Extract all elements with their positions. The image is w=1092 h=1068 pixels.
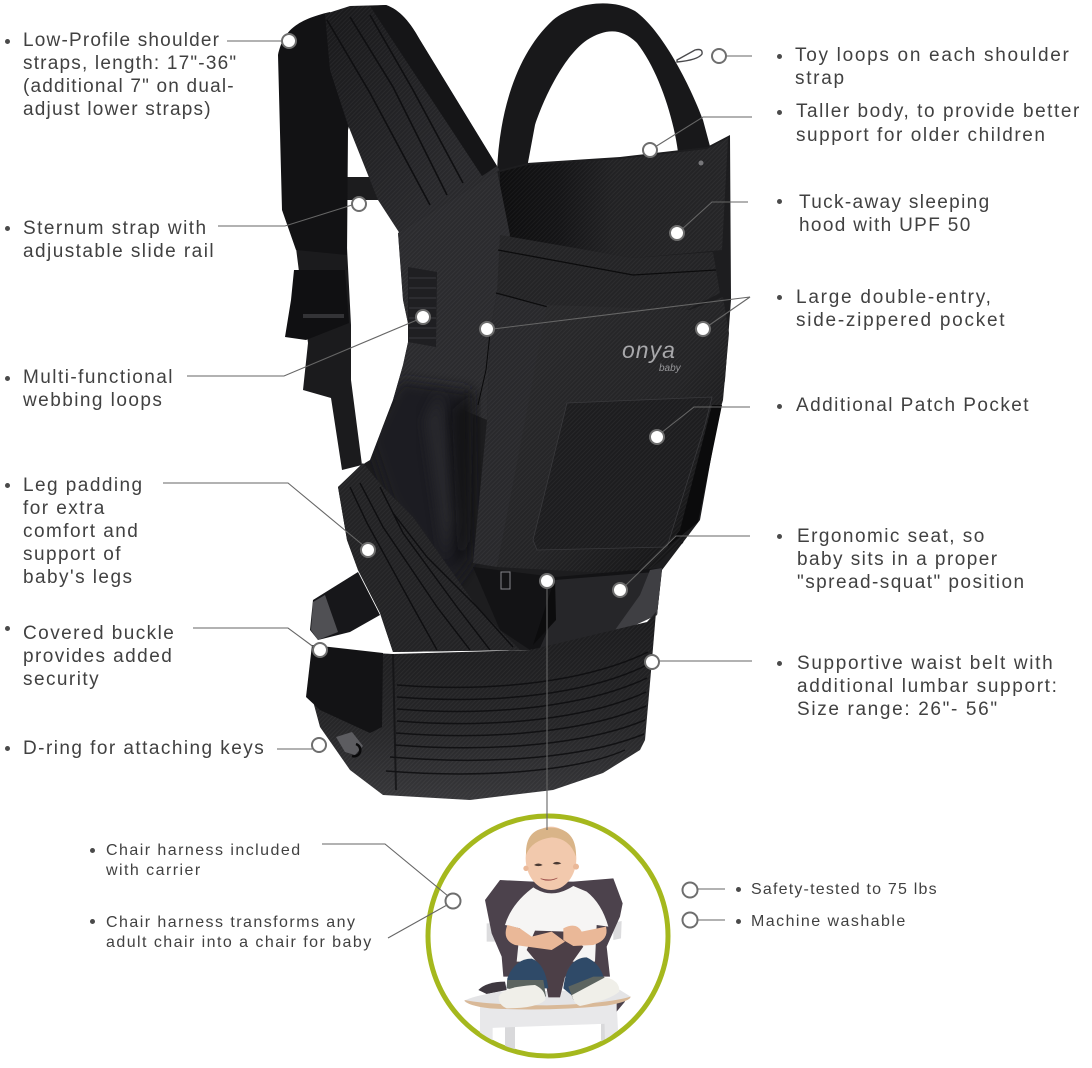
text: shoulder straps: (additional 7" on dual- xyxy=(23,76,235,97)
text: waist belt: Supportive waist belt with xyxy=(797,653,1054,674)
text: webbing loops: webbing loops xyxy=(23,390,163,411)
text: waist belt: Size range: 26"- 56" xyxy=(797,699,999,720)
lower webbing and buckle xyxy=(285,177,381,470)
safety marker xyxy=(682,882,698,898)
side body panel xyxy=(370,170,510,590)
text: ergonomic seat xyxy=(797,526,1026,593)
upper pocket band xyxy=(497,235,720,312)
text: leg padding: baby's legs xyxy=(23,567,133,588)
text: taller body: support for older children xyxy=(796,125,1046,146)
seat xyxy=(464,990,631,1010)
bullet: machine washable xyxy=(736,919,741,924)
text: harness included: with carrier xyxy=(106,862,202,879)
bullet: ergonomic seat xyxy=(777,534,782,539)
text: covered buckle: Covered buckle xyxy=(23,623,175,644)
text: shoulder straps xyxy=(23,30,237,120)
text: zippered pocket: Large double-entry, xyxy=(796,287,993,308)
lower waist strap xyxy=(310,572,380,640)
text: zippered pocket xyxy=(796,287,1006,331)
logo xyxy=(622,337,682,374)
text: leg padding: Leg padding xyxy=(23,475,144,496)
bullet: covered buckle xyxy=(5,626,10,631)
side zip strip xyxy=(473,293,548,567)
main body panel xyxy=(338,135,731,652)
bullet: patch pocket xyxy=(777,404,782,409)
text: taller body: Taller body, to provide better xyxy=(796,101,1081,122)
chair xyxy=(480,921,622,1052)
text: taller body xyxy=(796,101,1081,146)
bullet: shoulder straps xyxy=(5,39,10,44)
bullet: sternum strap xyxy=(5,226,10,231)
text: leg padding: comfort and xyxy=(23,521,139,542)
front shoulder strap hanging side xyxy=(278,12,360,255)
carrier xyxy=(278,3,731,800)
text: leg padding: for extra xyxy=(23,498,106,519)
text: shoulder straps: Low-Profile shoulder xyxy=(23,30,220,51)
text: patch pocket: Additional Patch Pocket xyxy=(796,395,1030,416)
text: sleeping hood: hood with UPF 50 xyxy=(799,215,972,236)
text: machine washable: Machine washable xyxy=(751,913,907,930)
illustration: carrier, callout lines and baby in chair harness xyxy=(163,3,752,1058)
text: webbing loops xyxy=(23,367,174,411)
text: harness transforms: adult chair into a chair for baby xyxy=(106,934,373,951)
text: sternum strap: adjustable slide rail xyxy=(23,241,215,262)
arms xyxy=(506,925,565,950)
text: covered buckle xyxy=(23,623,175,690)
bullet: safety tested xyxy=(736,887,741,892)
leg padding xyxy=(338,463,520,652)
patch pocket xyxy=(533,397,722,550)
text: sternum strap: Sternum strap with xyxy=(23,218,208,239)
text: harness included xyxy=(106,842,302,879)
text: sleeping hood xyxy=(799,192,991,236)
bullet: waist belt xyxy=(777,661,782,666)
callout markers xyxy=(282,34,726,752)
logo: baby xyxy=(659,363,682,374)
logo: onya xyxy=(622,337,676,363)
bullet: leg padding xyxy=(5,483,10,488)
bullet: harness transforms xyxy=(90,919,95,924)
text: webbing loops: Multi-functional xyxy=(23,367,174,388)
text: ergonomic seat: baby sits in a proper xyxy=(797,549,999,570)
head xyxy=(523,827,579,890)
d-ring tab xyxy=(336,732,363,756)
covered buckle pad xyxy=(306,645,383,733)
bullet: zippered pocket xyxy=(777,295,782,300)
callout lines xyxy=(163,41,752,938)
harness centre panel xyxy=(527,931,583,997)
text: covered buckle: security xyxy=(23,669,100,690)
seat underside xyxy=(473,567,662,650)
rear shoulder strap arch xyxy=(497,3,711,172)
chair harness marker xyxy=(446,894,460,908)
text: covered buckle: provides added xyxy=(23,646,173,667)
harness xyxy=(478,878,625,1012)
front pocket panel xyxy=(497,297,729,575)
text: harness transforms: Chair harness transforms any xyxy=(106,914,356,931)
jeans xyxy=(507,959,548,988)
text: safety tested: Safety-tested to 75 lbs xyxy=(751,881,938,898)
bullet: toy loops xyxy=(777,54,782,59)
text: ergonomic seat: "spread-squat" position xyxy=(797,572,1026,593)
toy loop xyxy=(677,50,702,62)
text: toy loops: Toy loops on each shoulder xyxy=(795,45,1071,66)
text: leg padding xyxy=(23,475,144,588)
text: ergonomic seat: Ergonomic seat, so xyxy=(797,526,986,547)
text: harness transforms xyxy=(106,914,373,951)
text: sleeping hood: Tuck-away sleeping xyxy=(799,192,991,213)
bullet: webbing loops xyxy=(5,376,10,381)
text: d-ring: D-ring for attaching keys xyxy=(23,738,265,759)
shirt xyxy=(505,886,608,962)
bullet: d-ring xyxy=(5,746,10,751)
text: zippered pocket: side-zippered pocket xyxy=(796,310,1006,331)
washable marker xyxy=(682,912,698,928)
text: leg padding: support of xyxy=(23,544,122,565)
front shoulder strap padded xyxy=(325,5,503,240)
text: sternum strap xyxy=(23,218,215,262)
bullet: harness included xyxy=(90,848,95,853)
bullet: sleeping hood xyxy=(777,199,782,204)
text: waist belt xyxy=(797,653,1059,720)
text: waist belt: additional lumbar support: xyxy=(797,676,1059,697)
text: harness included: Chair harness included xyxy=(106,842,302,859)
green circle xyxy=(428,816,668,1056)
bullet: taller body xyxy=(777,110,782,115)
waist belt xyxy=(310,612,656,800)
text: shoulder straps: adjust lower straps) xyxy=(23,99,212,120)
shoes xyxy=(507,980,546,997)
baby in chair harness xyxy=(428,816,668,1056)
text: toy loops: strap xyxy=(795,68,846,89)
text: shoulder straps: straps, length: 17"-36" xyxy=(23,53,237,74)
webbing loop patch xyxy=(408,267,437,347)
text: toy loops xyxy=(795,45,1071,89)
